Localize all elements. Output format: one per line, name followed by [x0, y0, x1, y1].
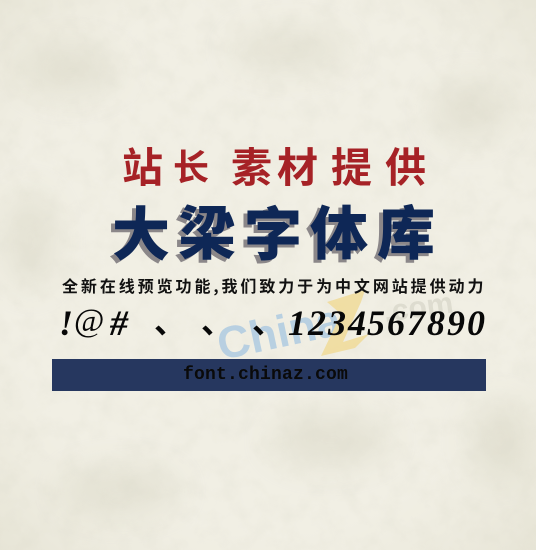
text: symbols and digits sample	[59, 297, 485, 343]
text: symbols and digits sample: 8	[427, 303, 445, 343]
text: symbols and digits sample: 7	[407, 303, 425, 343]
text: symbols and digits sample: 1	[288, 303, 306, 343]
text: symbols and digits sample: 3	[328, 303, 346, 343]
heading: red provider line: 素	[231, 134, 272, 194]
title: navy font library name: 大	[112, 188, 170, 272]
text: symbols and digits sample: 6	[387, 303, 405, 343]
title: navy font library name: 梁	[178, 187, 236, 271]
text: symbols and digits sample: !	[59, 303, 73, 343]
title: navy font library name	[110, 187, 435, 272]
text: preview description line: 全新在线预览功能,我们致力于为中文网站提供动力	[62, 273, 486, 297]
text: symbols and digits sample: 、	[252, 297, 284, 343]
title: navy font library name: 体	[310, 187, 368, 271]
heading: red provider line	[122, 134, 426, 194]
text: font.chinaz.com: font.chinaz.com	[183, 365, 348, 385]
text: symbols and digits sample: 2	[308, 303, 326, 343]
text: symbols and digits sample: 5	[367, 303, 385, 343]
text: symbols and digits sample: 9	[447, 303, 465, 343]
banner: website address	[52, 359, 486, 391]
text: symbols and digits sample: 、	[201, 297, 233, 343]
text: symbols and digits sample: #	[110, 303, 128, 343]
heading: red provider line: 站	[122, 134, 163, 194]
text: symbols and digits sample: 、	[154, 297, 186, 343]
watermark: China logo	[215, 290, 455, 370]
title: navy font library name: 字	[244, 188, 302, 272]
text: symbols and digits sample: 4	[348, 303, 366, 343]
text: symbols and digits sample: @	[74, 303, 104, 339]
text: symbols and digits sample: 0	[467, 303, 485, 343]
heading: red provider line: 供	[385, 134, 426, 194]
heading: red provider line: 长	[173, 139, 209, 191]
watermark: China logo: China	[215, 294, 346, 370]
heading: red provider line: 材	[277, 134, 318, 194]
title: navy font library name: 库	[377, 187, 435, 271]
heading: red provider line: 提	[331, 134, 372, 194]
